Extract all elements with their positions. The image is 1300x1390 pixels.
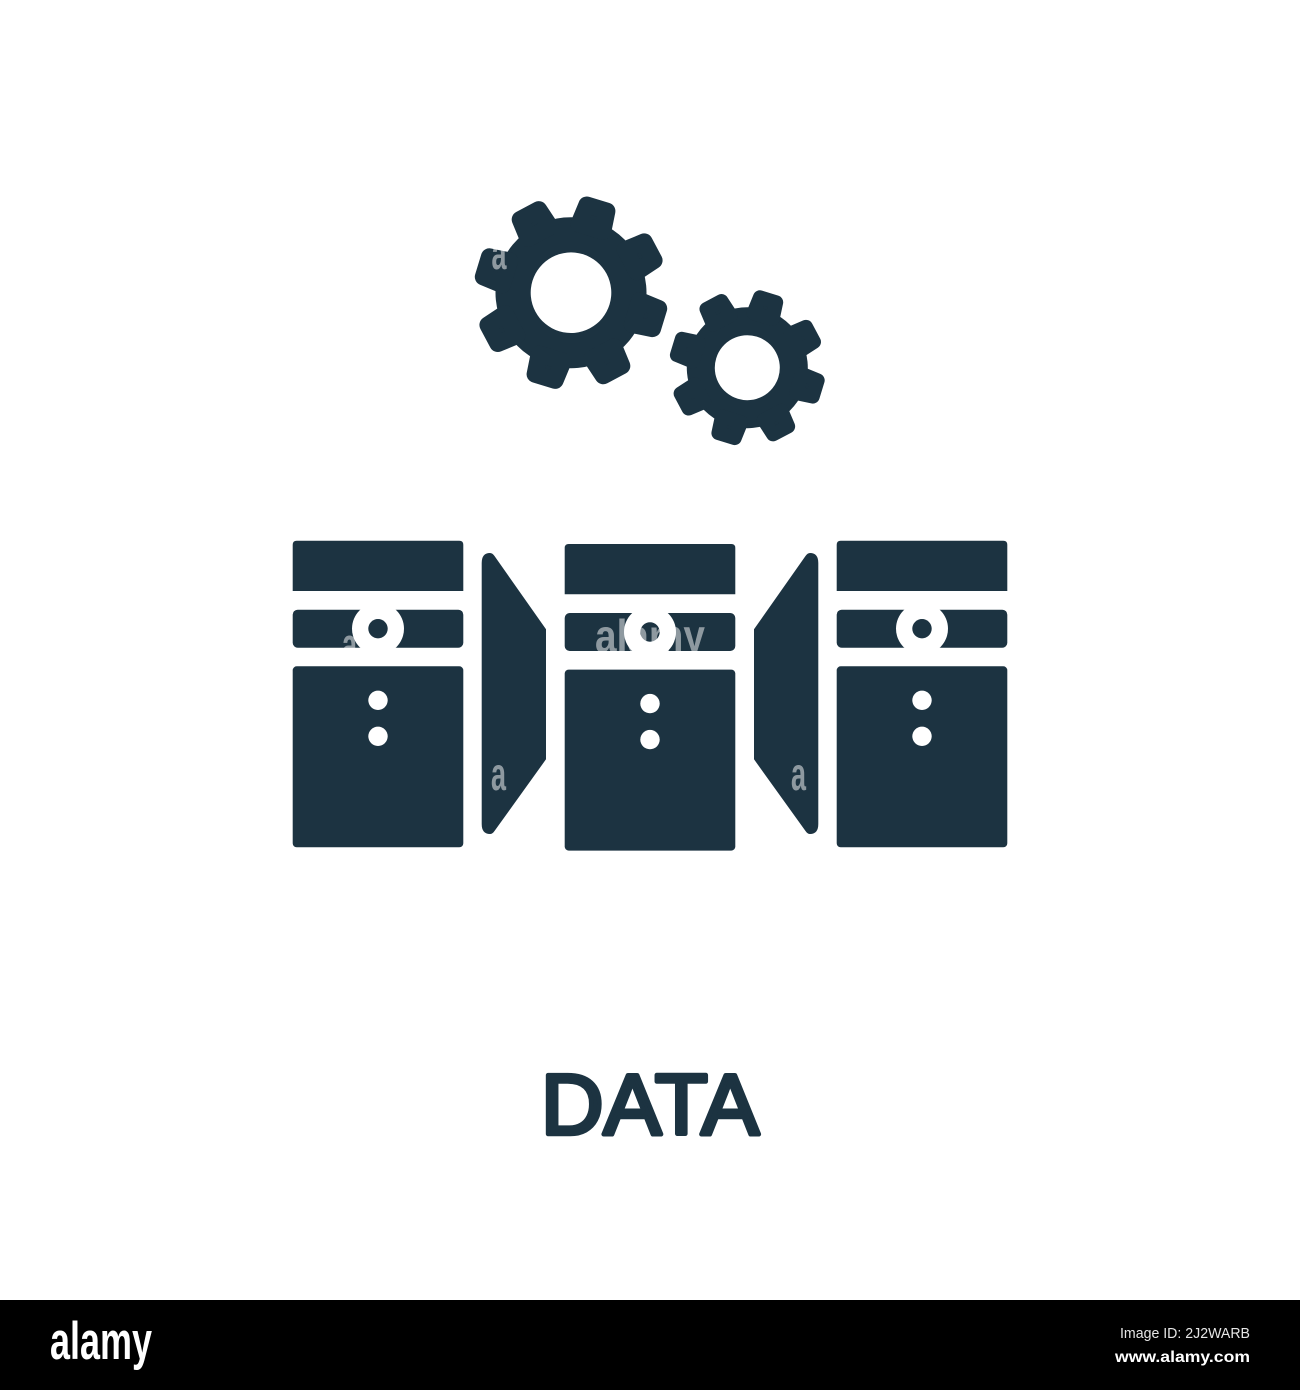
footer image id: Image ID: 2J2WARB	[1120, 1325, 1250, 1342]
footer logo: alamy: alamy	[50, 1312, 152, 1371]
icon: large gear	[460, 182, 682, 403]
watermark letters: a	[791, 748, 806, 800]
icon: left server tower	[293, 541, 463, 847]
watermark letters: a	[342, 619, 358, 670]
icon: middle server tower	[565, 544, 735, 851]
watermark letters	[342, 228, 806, 800]
icon: left connector panel	[482, 553, 546, 834]
watermark letters: a	[492, 228, 507, 279]
footer url: www.alamy.com	[1114, 1349, 1250, 1366]
watermark letters: alamy	[595, 610, 705, 662]
footer bar	[0, 1300, 1300, 1390]
title: DATA: DATA	[541, 1058, 759, 1153]
watermark letters: a	[491, 748, 506, 800]
icon: small gear	[659, 279, 836, 456]
icon: right server tower	[837, 541, 1007, 847]
icon: right connector panel	[754, 553, 818, 834]
